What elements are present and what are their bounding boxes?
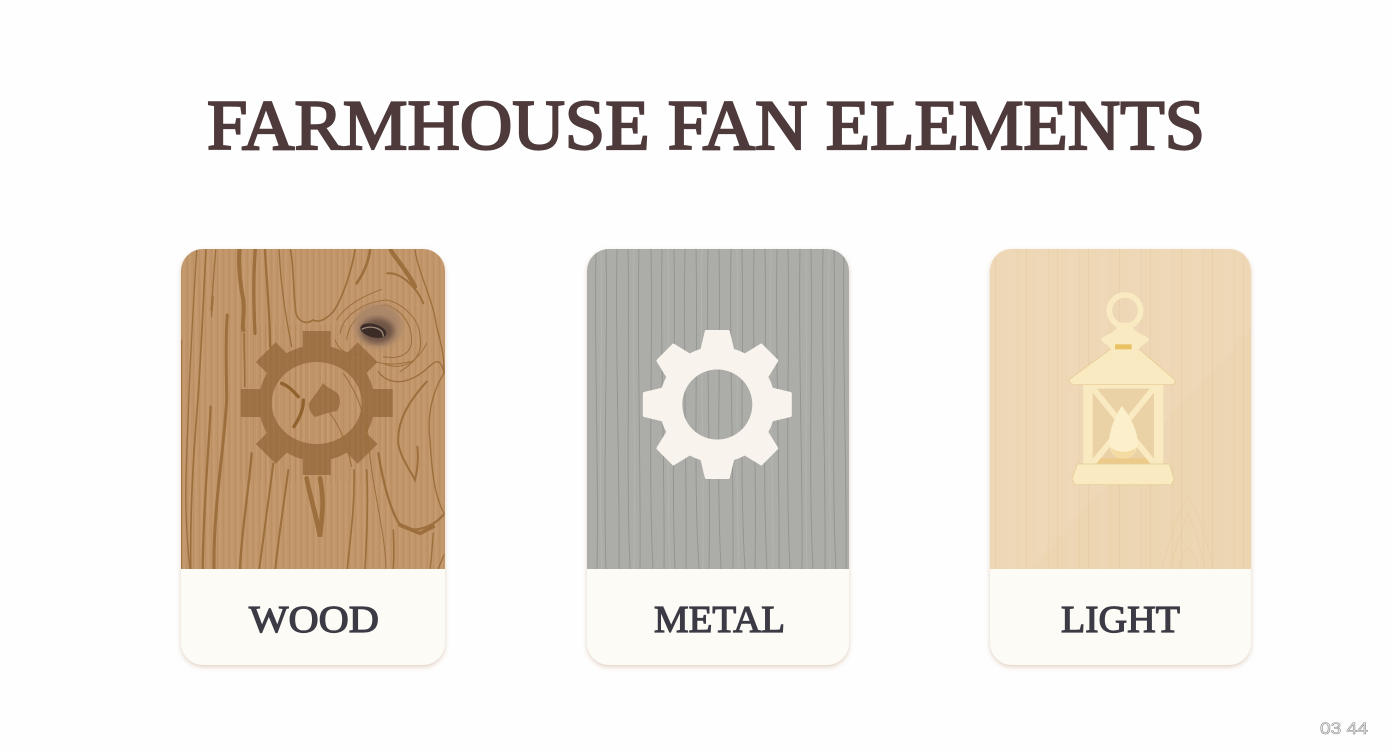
lantern flame <box>1109 406 1137 459</box>
watermark: 03 44 <box>1320 719 1368 738</box>
wood knot <box>354 304 402 348</box>
metal texture <box>587 249 849 569</box>
title: FARMHOUSE FAN ELEMENTS <box>207 87 1205 165</box>
lantern icon <box>1069 295 1176 485</box>
panel: light <box>990 249 1251 665</box>
light label: LIGHT <box>1061 599 1180 641</box>
wood gear icon <box>241 331 393 475</box>
light texture <box>990 249 1251 569</box>
wood texture <box>181 249 445 570</box>
metal gear icon <box>644 332 790 478</box>
wood label: WOOD <box>249 599 379 641</box>
panel: wood <box>181 249 445 665</box>
panel: metal <box>587 249 849 665</box>
metal label: METAL <box>654 599 785 641</box>
lantern window <box>1092 387 1155 463</box>
